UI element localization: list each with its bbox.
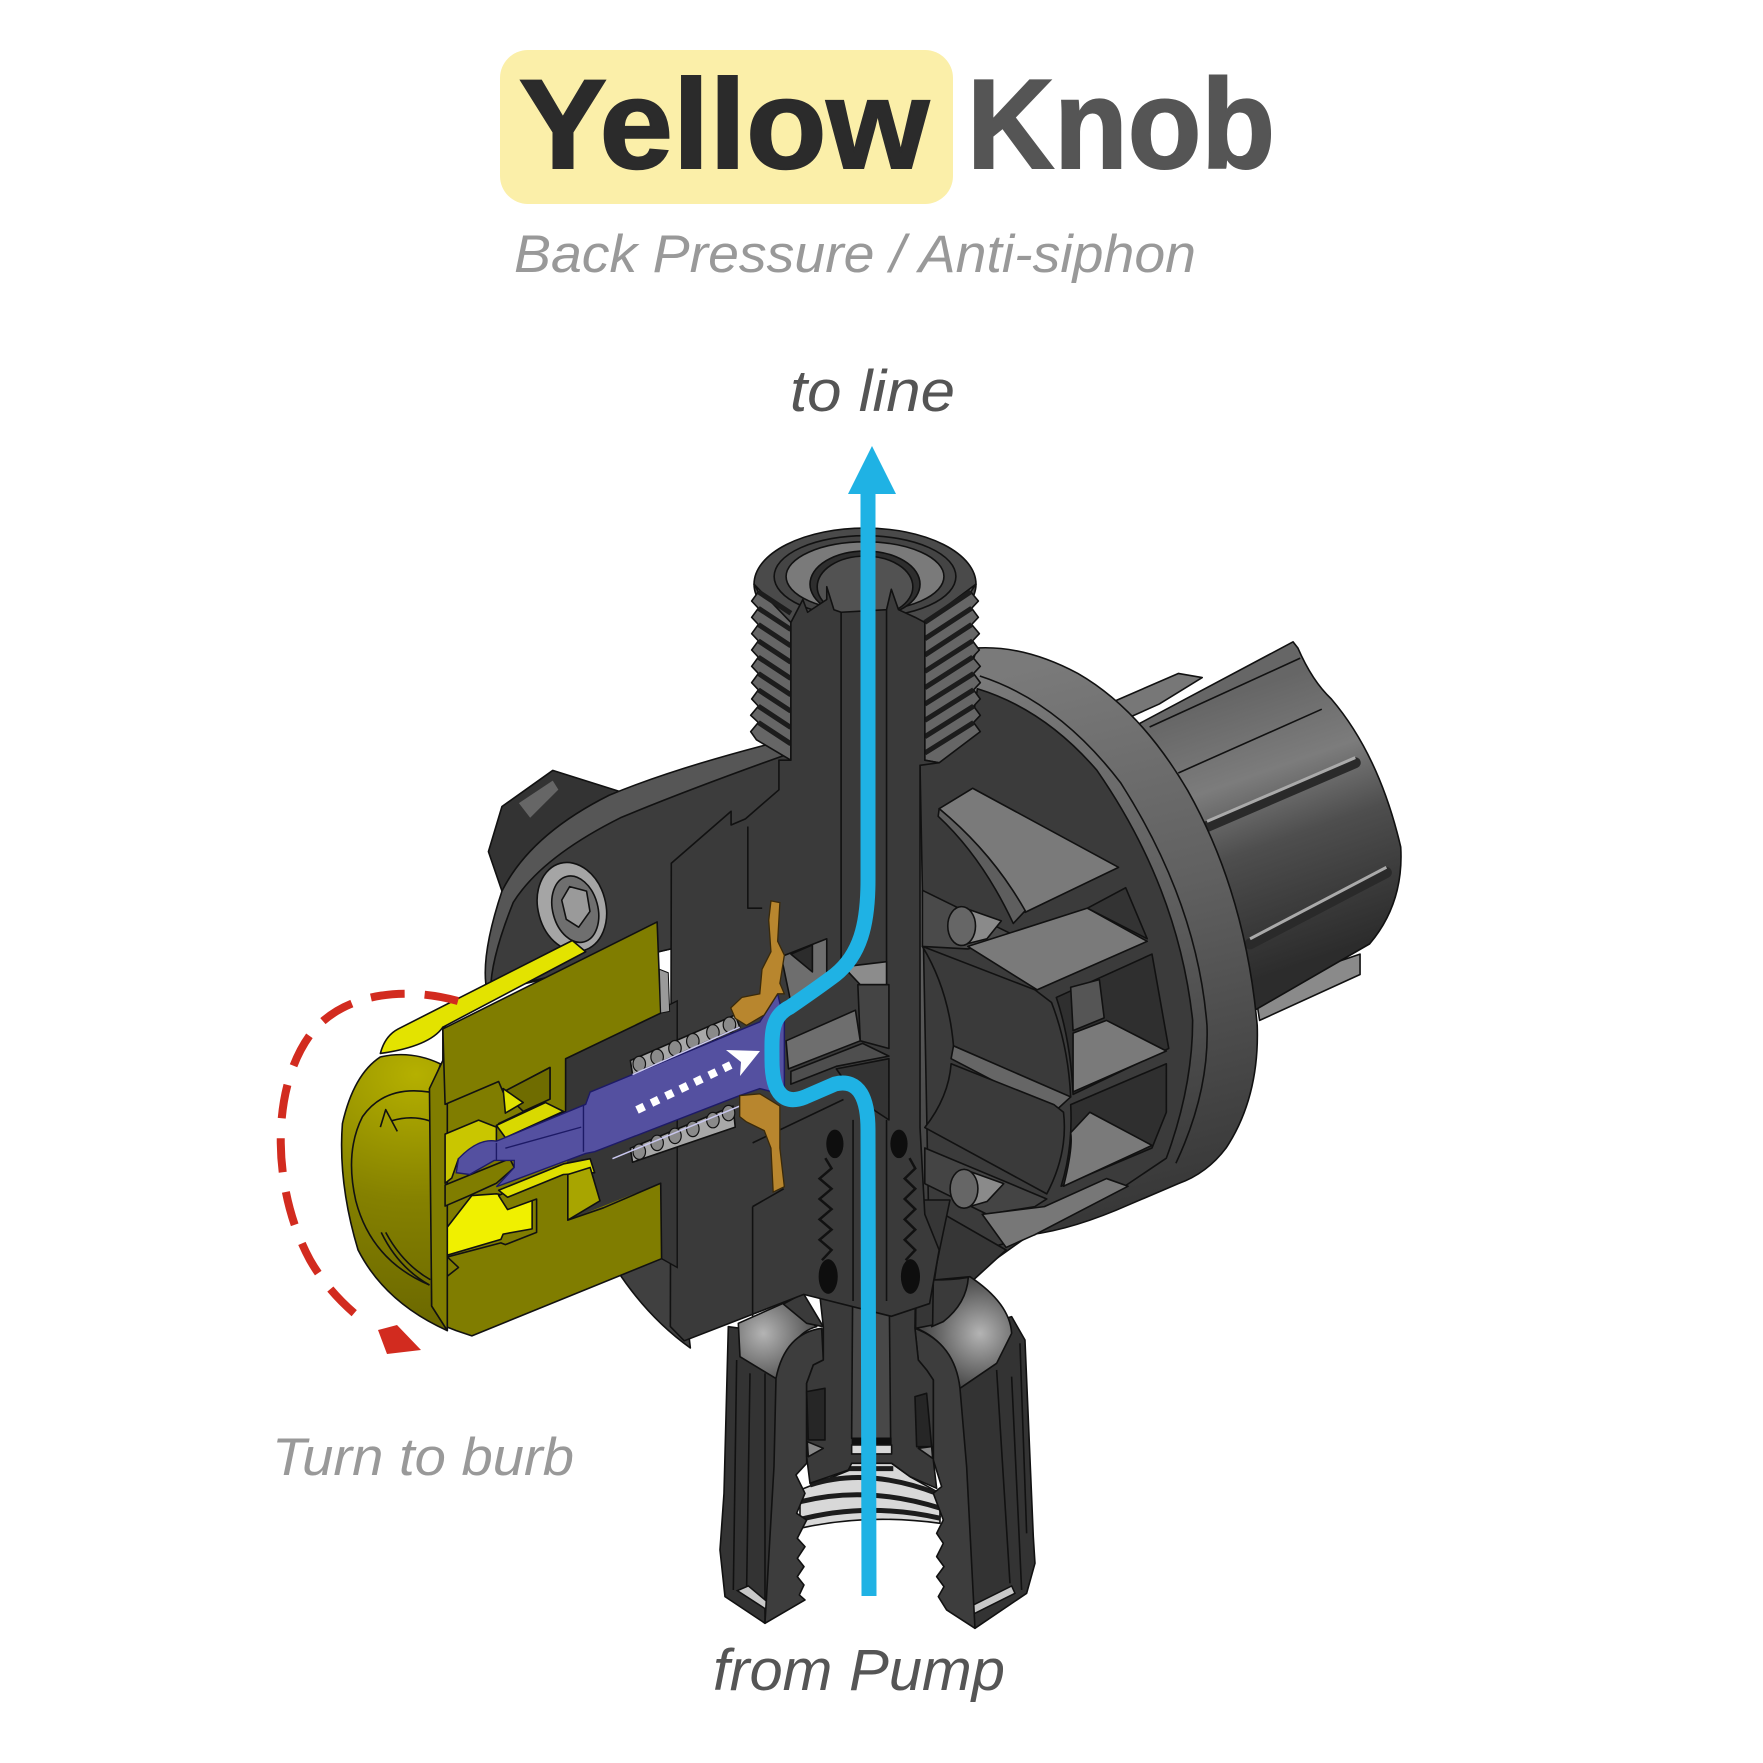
block behind knob <box>563 1001 677 1267</box>
rear left disc and cap <box>485 739 812 1348</box>
knob bright lower pocket <box>447 1194 532 1255</box>
spring coils <box>630 1015 740 1162</box>
red dashed rotation arrow <box>281 994 458 1354</box>
subtitle: Back Pressure / Anti-siphon <box>514 225 1196 284</box>
knob top highlight <box>380 941 586 1053</box>
inner column <box>807 1200 937 1488</box>
flow arrowhead <box>848 446 896 494</box>
bore <box>852 1200 891 1438</box>
central cut section <box>670 528 980 1341</box>
purple stem <box>456 994 784 1187</box>
valve cutaway illustration <box>342 528 1401 1628</box>
threaded outlet neck <box>751 528 980 763</box>
knob upper section <box>443 922 661 1136</box>
shoulders <box>738 1303 817 1380</box>
pins <box>948 907 1004 1208</box>
label: from pump: from Pump <box>713 1638 1005 1703</box>
title <box>500 50 1275 204</box>
knob dome <box>342 1055 447 1331</box>
title word: Knob: Knob <box>967 53 1275 195</box>
knob inner window <box>503 1067 550 1111</box>
yellow knob <box>342 922 677 1336</box>
knob lower section <box>447 1167 662 1336</box>
socket head bolt <box>528 855 616 959</box>
nut cut walls <box>765 1328 823 1623</box>
title word: Yellow: Yellow <box>519 53 930 195</box>
spring, stem and seat <box>456 901 784 1192</box>
water flow line with arrow <box>772 446 896 1596</box>
lower hose nut <box>720 1200 1035 1628</box>
title highlight pill <box>500 50 953 204</box>
gold seat <box>731 901 784 1025</box>
inner grey threads <box>800 1445 940 1528</box>
knob left wall <box>429 1027 447 1331</box>
label: turn to burb: Turn to burb <box>272 1428 574 1487</box>
rear knob and flange <box>891 642 1401 1281</box>
internal threads and o-rings <box>819 1130 920 1294</box>
knob left hole <box>445 1120 496 1183</box>
knob section base <box>443 922 662 1336</box>
white dotted movement arrow <box>637 1050 760 1110</box>
internal cavities <box>753 939 889 1316</box>
label: to line: to line <box>790 359 955 424</box>
